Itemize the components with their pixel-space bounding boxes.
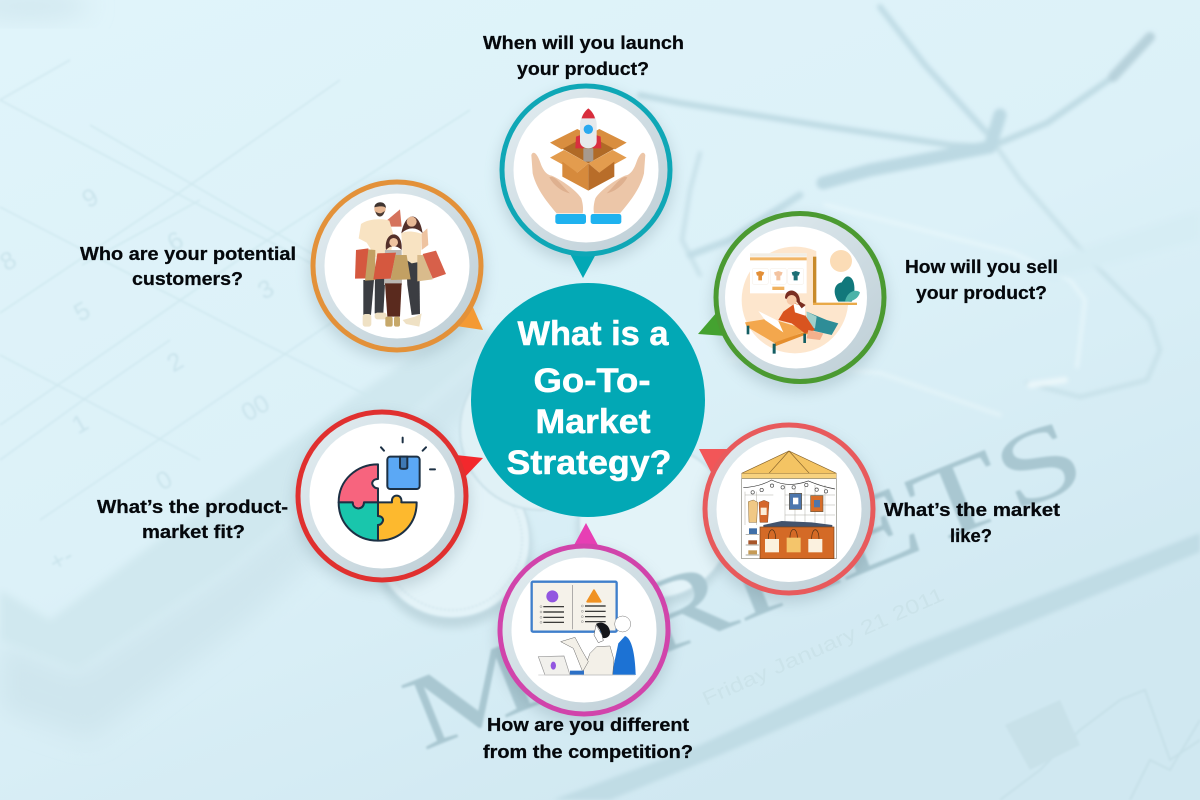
icon: family with shopping bags [355,202,446,327]
title: Strategy? [506,444,672,482]
background: calculator: 5 [69,296,95,327]
background: calculator: +- [45,542,78,577]
background: newspaper fold [553,533,1200,800]
icon: market stall [742,451,836,559]
label: the market: like? [950,526,992,546]
label: potential customers: Who are your potential [80,244,296,264]
title: Go-To- [534,362,650,400]
background: glasses [640,7,1160,415]
background: calculator: 2 [162,347,188,378]
background: calculator [0,60,530,740]
label: the market [884,500,1060,546]
pointer [699,449,729,474]
label: potential customers: customers? [132,269,243,289]
node: the market [699,425,877,603]
icon: two people presenting at a board [532,582,636,675]
background: newspaper headline: MARKETS [388,394,1099,772]
icon: woman shopping online [742,245,866,354]
background: calculator: 0 [151,465,177,496]
pointer [573,523,600,549]
title: Market [536,403,650,441]
background: coins [372,350,733,628]
node: product-market fit [294,412,483,590]
central circle [471,283,705,517]
label: product-market fit: market fit? [142,522,245,542]
pointer [456,305,483,330]
label: differentiation [483,715,693,762]
node: launch timing [498,86,674,278]
label: differentiation: How are you different [487,715,689,735]
label: differentiation: from the competition? [483,742,693,762]
label: launch timing: your product? [517,59,649,79]
icon: puzzle with product box [339,438,435,541]
background: calculator: 6 [162,226,188,257]
label: launch timing [483,33,684,79]
background: calculator: 1 [67,409,93,440]
background: calculator: 9 [77,183,103,214]
label: the market: What’s the market [884,500,1060,520]
label: how to sell: How will you sell [905,257,1058,277]
pointer [698,312,726,336]
label: launch timing: When will you launch [483,33,684,53]
node: how to sell [698,214,888,392]
label: how to sell: your product? [916,283,1047,303]
label: potential customers [80,244,296,289]
background: newspaper date: Friday January 21 2011 [699,584,947,711]
title: What is a [518,315,670,353]
pointer [456,455,483,479]
node: differentiation [496,523,672,724]
label: how to sell [905,257,1058,303]
label: product-market fit [97,497,288,542]
pointer [568,250,596,278]
background: newspaper chart [1000,690,1200,800]
background: calculator: 3 [253,274,279,305]
node: potential customers [309,182,485,360]
icon: rocket in box held by hands [531,108,645,224]
title [506,315,672,482]
label: product-market fit: What’s the product- [97,497,288,517]
background: calculator: 00 [237,389,275,427]
